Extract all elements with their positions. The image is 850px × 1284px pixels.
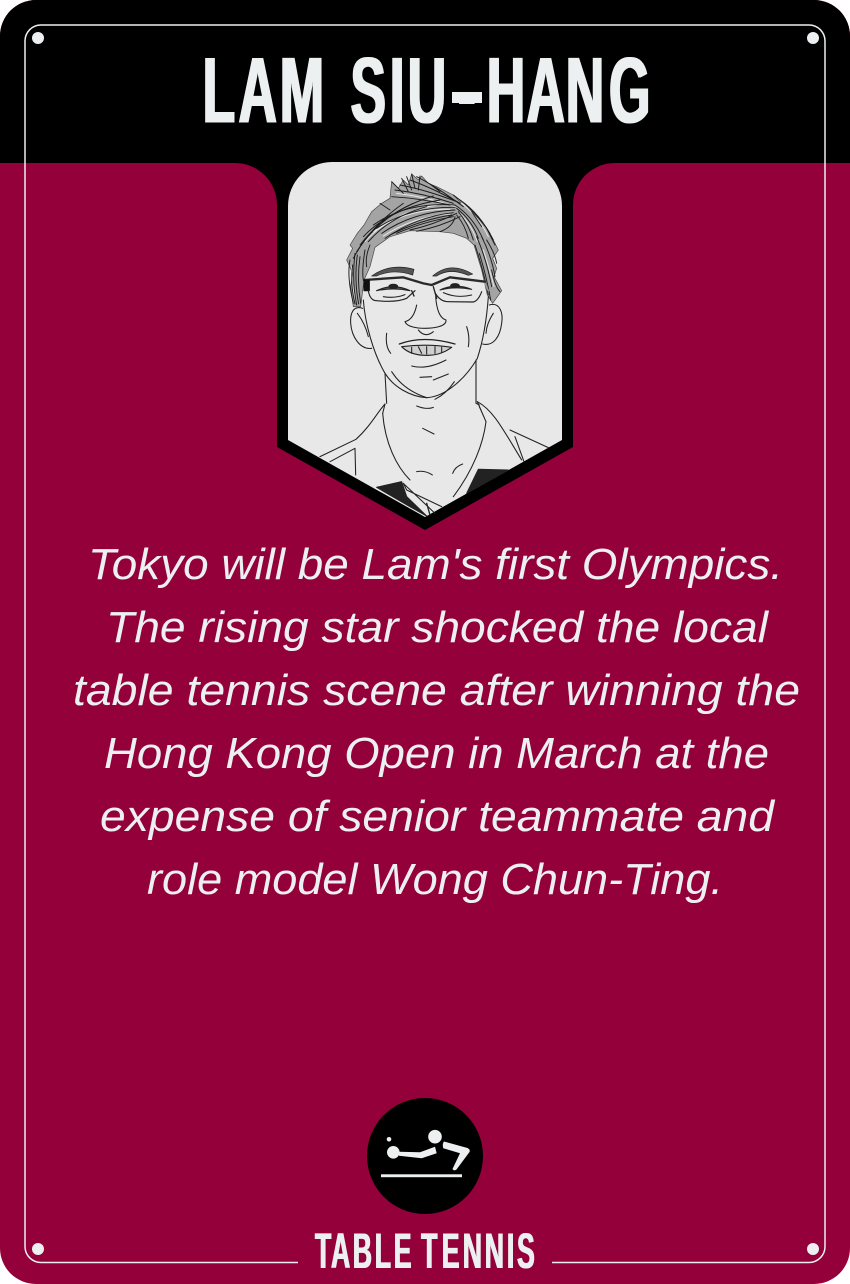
description text: Hong Kong Open in March at the [104,729,769,778]
description text [73,540,800,904]
description text: The rising star shocked the local [106,603,769,652]
sport label: TABLE TENNIS [315,1224,535,1279]
description text: table tennis scene after winning the [73,666,800,715]
portrait line drawing [320,174,548,516]
eyebrows [372,267,473,276]
ears and face outline [351,297,502,398]
hair [347,174,502,307]
neck curves joining header to portrait shield [235,163,615,240]
description text: role model Wong Chun-Ting. [147,855,723,904]
glasses [364,277,488,302]
description text: expense of senior teammate and [100,792,776,841]
description text: Tokyo will be Lam's first Olympics. [88,540,783,589]
header band [0,0,850,163]
neck [383,360,486,497]
title: LAM SIU-HANG [203,39,650,143]
icon: table tennis player [367,1098,483,1214]
portrait shield [277,162,573,530]
mouth [386,327,469,399]
shirt collar [320,402,548,516]
nose [405,297,446,335]
